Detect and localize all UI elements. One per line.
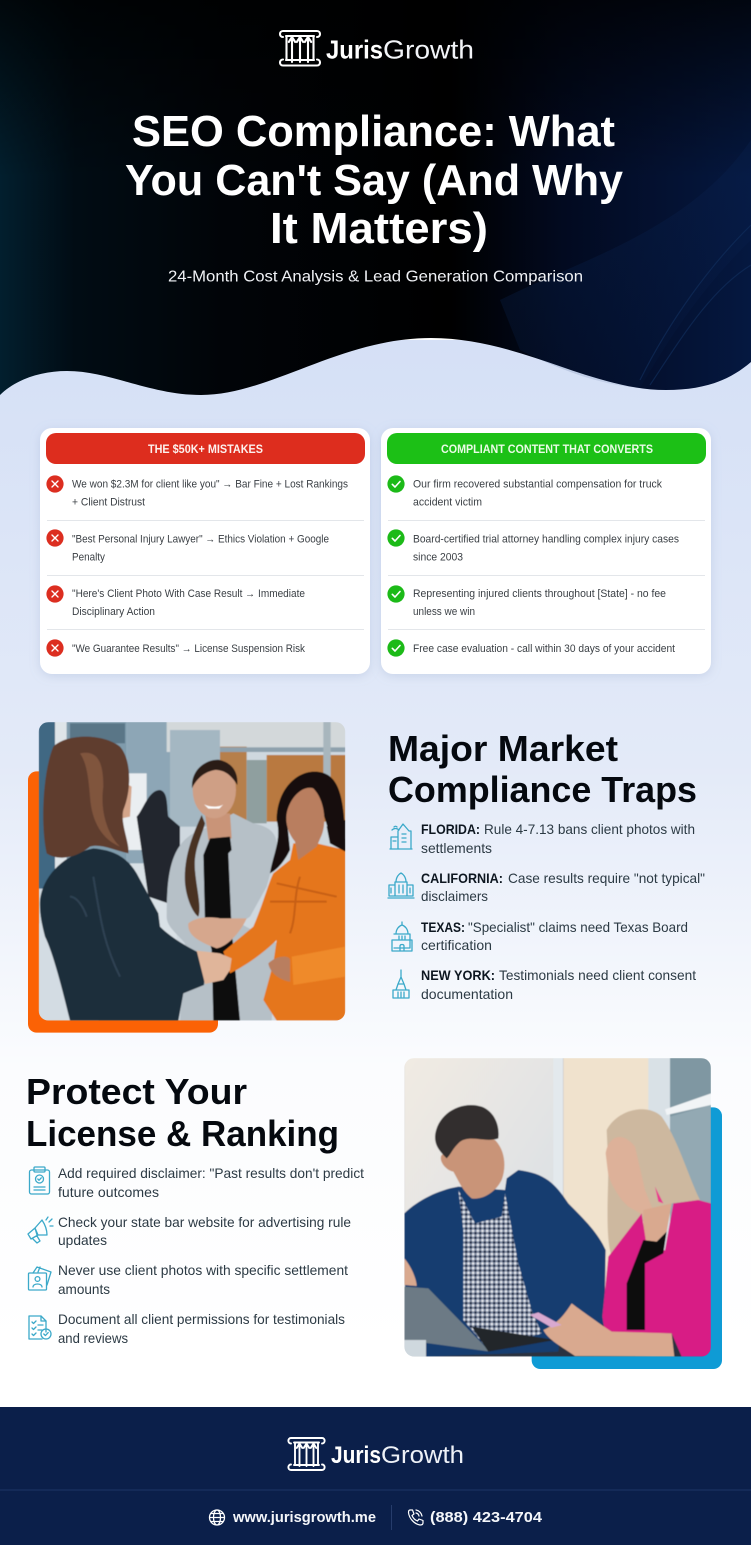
icon: column with arrows: [288, 1438, 325, 1470]
trap: New York: Testimonials need client consent: [499, 967, 696, 983]
icon: megaphone: [28, 1217, 53, 1243]
right woman: [223, 843, 345, 1021]
trap: Texas: certification: [421, 937, 492, 953]
icon: phone: [408, 1510, 423, 1525]
logo: JurisGrowth footer: Juris: [331, 1442, 381, 1469]
list: protection steps: [28, 1165, 364, 1346]
panel: the $50K+ mistakes: [40, 428, 370, 674]
trap: Texas: TEXAS:: [421, 919, 465, 935]
trap: New York: [393, 967, 696, 1002]
compliant 2: since 2003: [413, 552, 463, 564]
trap: California: [388, 870, 705, 904]
step: permissions: and reviews: [58, 1330, 128, 1346]
icon: column with arrows: [280, 31, 320, 66]
heading: compliant banner: [387, 433, 706, 464]
trap: Florida: [390, 821, 695, 856]
heading: protect your license & ranking: Protect Your: [26, 1071, 247, 1112]
heading: protect your license & ranking: [26, 1071, 339, 1154]
step: state bar: updates: [58, 1232, 107, 1248]
icon: New York tower: [393, 970, 409, 998]
title: It Matters): [270, 204, 488, 253]
step: state bar: [28, 1214, 351, 1248]
mistake 2: Penalty: [72, 552, 105, 564]
contact: phone: (888) 423-4704: [430, 1509, 543, 1526]
mistake 1: [46, 475, 348, 508]
logo: JurisGrowth footer: Growth: [381, 1442, 464, 1469]
compliant 1: accident victim: [413, 496, 482, 508]
mistake 2: "Best Personal Injury Lawyer" → Ethics Violation + Google: [72, 534, 329, 546]
trap: Florida: FLORIDA:: [421, 821, 480, 837]
step: disclaimer: Add required disclaimer: "Past results don't predict: [58, 1165, 364, 1181]
icon: clipboard: [30, 1167, 50, 1194]
compliant 1: [387, 475, 662, 508]
logo: JurisGrowth header: Growth: [383, 34, 474, 64]
step: disclaimer: [30, 1165, 364, 1200]
step: client photos: [28, 1262, 348, 1297]
step: client photos: amounts: [58, 1281, 110, 1297]
contact: website: www.jurisgrowth.me: [232, 1509, 376, 1526]
heading: mistakes banner: [46, 433, 365, 464]
title: You Can't Say (And Why: [125, 156, 624, 205]
mistake 4: [46, 639, 305, 657]
compliant 2: [387, 529, 679, 564]
compliant 3: Representing injured clients throughout [State] - no fee: [413, 588, 666, 600]
compliant 4: [387, 639, 675, 657]
heading: compliant banner: COMPLIANT CONTENT THAT CONVERTS: [441, 444, 653, 456]
mistake 3: Disciplinary Action: [72, 606, 155, 618]
photo: two colleagues with blue accent: [404, 1058, 722, 1369]
step: disclaimer: future outcomes: [58, 1184, 159, 1200]
mistake 4: "We Guarantee Results" → License Suspension Risk: [72, 643, 305, 655]
list: state traps: [388, 821, 705, 1002]
mistake 3: "Here's Client Photo With Case Result → Immediate: [72, 588, 305, 600]
mistake 2: [46, 529, 329, 564]
logo: JurisGrowth footer: [288, 1438, 464, 1470]
heading: protect your license & ranking: License & Ranking: [26, 1113, 339, 1154]
panel: compliant content that converts: [381, 428, 711, 674]
step: client photos: Never use client photos with specific settlement: [58, 1262, 348, 1278]
compliant 4: Free case evaluation - call within 30 days of your accident: [413, 643, 675, 655]
step: permissions: Document all client permissions for testimonials: [58, 1311, 345, 1327]
trap: Florida: settlements: [421, 840, 492, 856]
title: [125, 107, 624, 253]
footer: [0, 1407, 751, 1545]
trap: California: CALIFORNIA:: [421, 870, 503, 886]
heading: major market compliance traps: [388, 728, 697, 810]
logo: JurisGrowth header: [280, 31, 474, 66]
mistake 1: We won $2.3M for client like you" → Bar Fine + Lost Rankings: [72, 478, 348, 490]
photo: handshake with orange accent: [28, 722, 346, 1033]
handshake: [197, 951, 232, 984]
trap: New York: documentation: [421, 986, 513, 1002]
trap: Texas: [392, 919, 688, 953]
compliant 3: unless we win: [413, 606, 475, 618]
subtitle: 24-Month Cost Analysis & Lead Generation Comparison: [168, 268, 583, 286]
compliant 1: Our firm recovered substantial compensation for truck: [413, 478, 662, 490]
trap: California: disclaimers: [421, 888, 488, 904]
compliant 3: [387, 585, 666, 618]
trap: Texas: "Specialist" claims need Texas Board: [468, 919, 688, 935]
compliant 2: Board-certified trial attorney handling complex injury cases: [413, 534, 679, 546]
icon: California building: [388, 873, 414, 898]
heading: major market compliance traps: Compliance Traps: [388, 769, 697, 810]
header background with wave: [0, 0, 751, 395]
title: SEO Compliance: What: [132, 107, 615, 156]
icon: checklist: [29, 1316, 51, 1339]
woman: [607, 1109, 700, 1257]
heading: major market compliance traps: Major Market: [388, 728, 618, 769]
heading: mistakes banner: THE $50K+ MISTAKES: [148, 444, 263, 456]
mistake 3: [46, 585, 305, 618]
icon: photos: [28, 1267, 51, 1290]
trap: New York: NEW YORK:: [421, 967, 495, 983]
man: [404, 1170, 606, 1357]
icon: globe: [210, 1510, 224, 1525]
icon: Florida skyline: [390, 824, 412, 849]
step: permissions: [29, 1311, 345, 1346]
middle woman: [167, 813, 277, 1021]
step: state bar: Check your state bar website for advertising rule: [58, 1214, 351, 1230]
mistake 1: + Client Distrust: [72, 496, 145, 508]
trap: California: Case results require "not typical": [508, 870, 705, 886]
icon: Texas capitol: [392, 922, 412, 951]
trap: Florida: Rule 4-7.13 bans client photos with: [484, 821, 695, 837]
left woman: [122, 784, 132, 818]
logo: JurisGrowth header: Juris: [326, 34, 383, 64]
